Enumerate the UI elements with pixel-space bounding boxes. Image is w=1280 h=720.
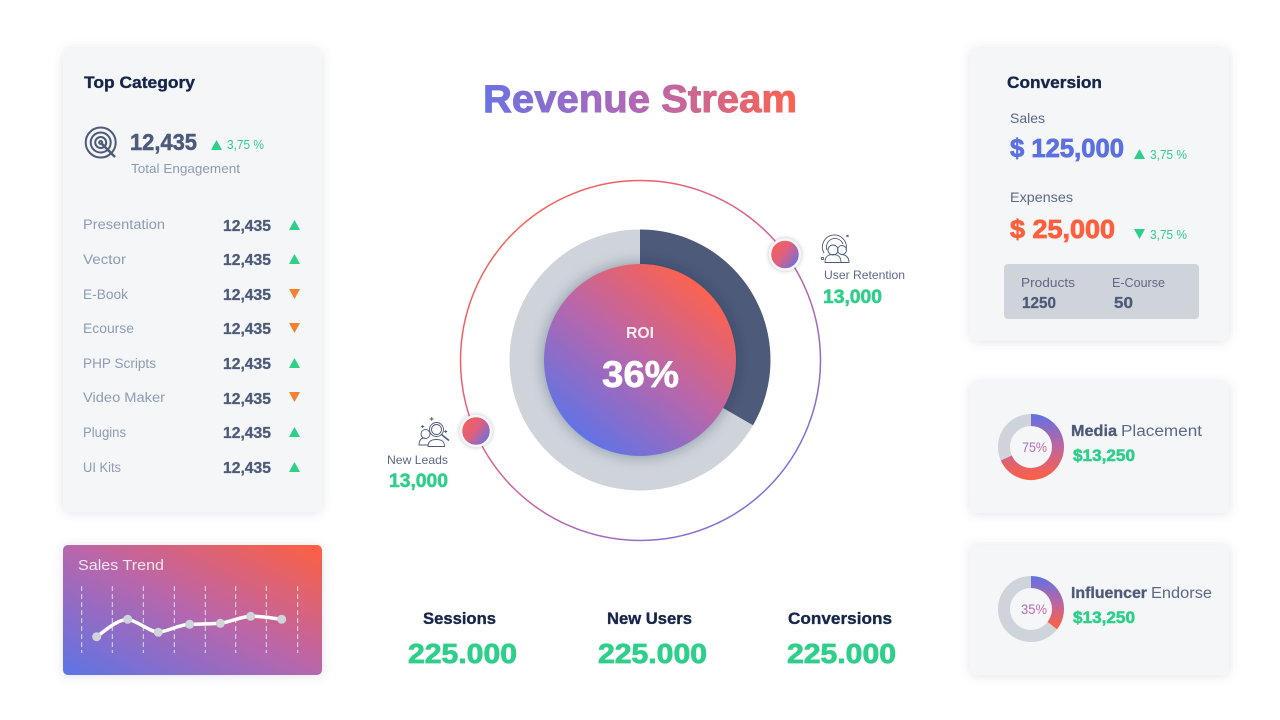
marker: new leads (461, 416, 491, 446)
label: media placement: Media (1071, 423, 1117, 440)
stat: conversions: Conversions (788, 610, 892, 628)
row: presentation: 12,435 (223, 218, 271, 235)
row: ecourse: Ecourse (83, 321, 134, 336)
stat: new users (598, 610, 707, 669)
callout: new leads (387, 417, 449, 492)
row: video maker: 12,435 (223, 391, 271, 408)
heading: top category: Top Category (84, 74, 196, 92)
stat: sessions: 225.000 (408, 638, 517, 669)
row: ui kits: UI Kits (83, 460, 121, 475)
stat: new users: New Users (607, 610, 692, 628)
expenses trend: 3,75 % (1150, 228, 1187, 242)
panel: conversion (970, 48, 1229, 341)
row: video maker: Video Maker (83, 390, 166, 405)
row: video maker (83, 390, 300, 408)
panel: media placement (970, 382, 1229, 513)
row: e-book (83, 287, 300, 304)
trend percent: 3,75 % (227, 138, 264, 152)
row: vector: Vector (83, 252, 127, 267)
sales trend (1134, 148, 1187, 162)
row: php scripts: PHP Scripts (83, 356, 156, 371)
stat: conversions (787, 610, 896, 669)
label: User Retention (824, 268, 905, 282)
trend up triangle (211, 140, 222, 150)
label: influencer endorse (1071, 585, 1212, 602)
value: 13,000 (823, 287, 882, 308)
sub-panel: products and e-course: E-Course (1112, 275, 1165, 290)
icon: target (86, 128, 116, 158)
outer ring (460, 180, 820, 540)
title: Revenue Stream (483, 78, 797, 121)
sales label: Sales (1010, 110, 1045, 126)
line chart (82, 586, 298, 653)
sub-panel: products and e-course (1004, 264, 1199, 319)
donut: 35% (1004, 582, 1058, 636)
label: media placement (1071, 423, 1203, 440)
row: presentation (83, 217, 300, 235)
panel: sales trend (63, 545, 322, 675)
donut: 75%: 75% (1022, 440, 1047, 455)
callout: user retention (821, 235, 905, 308)
value: $13,250 (1073, 609, 1135, 627)
sub-panel: products and e-course: 50 (1114, 295, 1133, 312)
label: influencer endorse: Endorse (1151, 585, 1212, 602)
stat: new users: 225.000 (598, 638, 707, 669)
heading: sales trend: Sales Trend (78, 557, 164, 574)
label: New Leads (387, 453, 448, 467)
row: ecourse (83, 321, 300, 338)
heading: conversion: Conversion (1007, 74, 1102, 92)
expenses trend (1134, 228, 1187, 242)
row: presentation: Presentation (83, 217, 165, 232)
row: ui kits (83, 460, 300, 477)
sub-panel: products and e-course: Products (1021, 275, 1076, 290)
panel: top category (63, 48, 322, 512)
row: plugins: 12,435 (223, 425, 271, 442)
stat: sessions (408, 610, 517, 669)
row: ui kits: 12,435 (223, 460, 271, 477)
sales value: $ 125,000 (1010, 133, 1124, 163)
donut: 75% (1004, 420, 1058, 474)
label: influencer endorse: Influencer (1071, 585, 1147, 602)
row: php scripts (83, 356, 300, 373)
sales trend: 3,75 % (1150, 148, 1187, 162)
row: e-book: 12,435 (223, 287, 271, 304)
stat: conversions: 225.000 (787, 638, 896, 669)
donut chart: roi (510, 230, 770, 490)
icon: user retention (821, 235, 849, 262)
total engagement label: Total Engagement (131, 161, 240, 176)
marker: user retention (770, 240, 800, 270)
sub-panel: products and e-course: 1250 (1022, 295, 1056, 312)
label: media placement: Placement (1121, 423, 1203, 440)
row: php scripts: 12,435 (223, 356, 271, 373)
value: 13,000 (389, 471, 448, 492)
icon: new leads (419, 417, 449, 446)
value: $13,250 (1073, 447, 1135, 465)
panel: influencer endorse (970, 545, 1229, 675)
roi label: ROI (626, 325, 654, 342)
row: e-book: E-Book (83, 287, 128, 302)
row: plugins: Plugins (83, 425, 126, 440)
donut: 35%: 35% (1021, 602, 1047, 617)
total engagement value: 12,435 (130, 129, 197, 155)
row: plugins (83, 425, 300, 442)
expenses label: Expenses (1010, 189, 1073, 205)
expenses value: $ 25,000 (1010, 214, 1115, 244)
row: ecourse: 12,435 (223, 321, 271, 338)
roi value: 36% (602, 354, 679, 395)
stat: sessions: Sessions (423, 610, 496, 628)
row: vector (83, 252, 300, 269)
row: vector: 12,435 (223, 252, 271, 269)
